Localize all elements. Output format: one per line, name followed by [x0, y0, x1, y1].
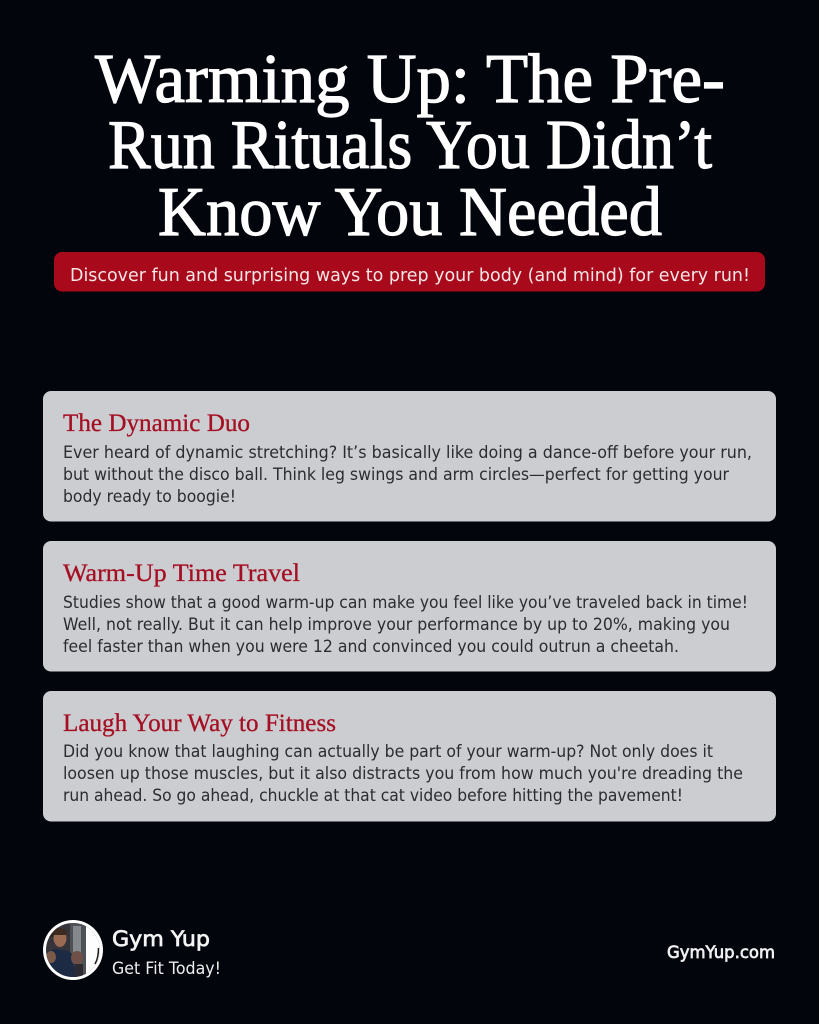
panel: The Dynamic Duo: [43, 391, 776, 522]
heading: The Dynamic Duo: The Dynamic Duo: [63, 410, 250, 437]
text block: dynamic stretching: [63, 443, 752, 506]
icon: Gym Yup avatar: [43, 920, 103, 980]
title: [95, 41, 725, 251]
text block: performance: feel faster than when you were 12 and convinced you could outrun a cheetah.: [63, 637, 679, 656]
text block: laughing: run ahead. So go ahead, chuckle at that cat video before hitting the pavement!: [63, 786, 683, 805]
text block: laughing: Did you know that laughing can actually be part of your warm-up? Not only does it: [63, 742, 714, 761]
panel: Laugh Your Way to Fitness: [43, 691, 776, 822]
text block: dynamic stretching: but without the disco ball. Think leg swings and arm circles—perfect for getting your: [63, 465, 729, 484]
heading: Laugh Your Way to Fitness: Laugh Your Way to Fitness: [63, 710, 336, 737]
title: Know You Needed: [158, 174, 662, 251]
title: Run Rituals You Didn’t: [108, 107, 712, 184]
text block: laughing: loosen up those muscles, but it also distracts you from how much you're dreading the: [63, 764, 743, 783]
title: Warming Up: The Pre-: [95, 41, 725, 118]
text block: laughing: [63, 742, 743, 805]
text block: dynamic stretching: Ever heard of dynamic stretching? It’s basically like doing a dance-off before your run,: [63, 443, 752, 462]
panel: Warm-Up Time Travel: [43, 541, 776, 672]
subtitle banner: [54, 252, 765, 292]
brand name: Gym Yup: [112, 927, 210, 951]
text block: dynamic stretching: body ready to boogie!: [63, 487, 236, 506]
website: GymYup.com: [667, 943, 775, 962]
heading: Warm-Up Time Travel: Warm-Up Time Travel: [63, 560, 300, 587]
text block: performance: Well, not really. But it can help improve your performance by up to 20%, making you: [63, 615, 730, 634]
text block: performance: Studies show that a good warm-up can make you feel like you’ve traveled back in time!: [63, 593, 748, 612]
text block: performance: [63, 593, 748, 656]
tagline: Get Fit Today!: [112, 959, 221, 978]
subtitle banner: Discover fun and surprising ways to prep your body (and mind) for every run!: [70, 265, 750, 286]
